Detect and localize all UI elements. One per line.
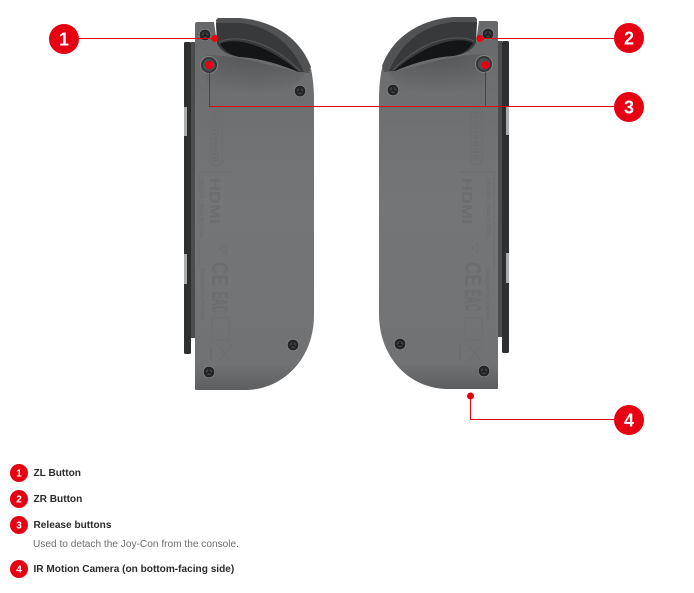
callout 2: 2 xyxy=(624,28,634,48)
legend xyxy=(10,464,239,578)
callout 3: 3 xyxy=(624,98,634,118)
engraving: right Joy-Con markings: Nintendo xyxy=(471,112,481,160)
engraving: right Joy-Con markings xyxy=(458,108,494,362)
engraving: left Joy-Con markings xyxy=(198,110,234,362)
leader line 1 xyxy=(64,35,218,42)
legend item 2: ZR Button xyxy=(34,494,82,505)
legend item 3: 3 xyxy=(16,520,22,532)
engraving: right Joy-Con markings: Designed by Nintendo xyxy=(484,268,490,321)
engraving: left Joy-Con markings: EAC xyxy=(207,292,233,313)
callout 1 xyxy=(49,24,79,54)
leader line 4 xyxy=(467,392,629,420)
left Joy-Con xyxy=(184,18,314,390)
legend item 3 xyxy=(10,516,239,550)
callout 2 xyxy=(614,23,644,53)
legend item 4: 4 xyxy=(16,564,22,576)
engraving: right Joy-Con markings: HDMI xyxy=(458,178,475,224)
engraving: right Joy-Con markings: CE xyxy=(460,262,486,286)
leader lines 3 xyxy=(206,61,629,106)
legend item 4 xyxy=(10,560,234,578)
legend item 1: 1 xyxy=(16,468,22,480)
callout 4: 4 xyxy=(624,410,634,430)
legend item 2: 2 xyxy=(16,494,22,506)
callout 1: 1 xyxy=(59,30,69,50)
legend item 3: Release buttons xyxy=(34,520,112,531)
engraving: right Joy-Con markings: EAC xyxy=(460,290,486,311)
engraving: left Joy-Con markings: HAC-016 · Made in China xyxy=(198,178,204,237)
callout 4 xyxy=(614,405,644,435)
legend item 3: Used to detach the Joy-Con from the console. xyxy=(33,539,239,550)
legend item 4: IR Motion Camera (on bottom-facing side) xyxy=(34,564,234,575)
engraving: left Joy-Con markings: CE xyxy=(207,262,233,286)
engraving: right Joy-Con markings: HAC-015 · Made in China xyxy=(485,178,491,237)
legend item 1 xyxy=(10,464,81,482)
engraving: left Joy-Con markings: HDMI xyxy=(206,178,223,224)
legend item 2 xyxy=(10,490,82,508)
leader line 2 xyxy=(476,35,629,42)
engraving: left Joy-Con markings: Nintendo xyxy=(211,114,221,162)
legend item 1: ZL Button xyxy=(34,468,81,479)
callout 3 xyxy=(614,92,644,122)
right Joy-Con xyxy=(379,17,509,389)
engraving: left Joy-Con markings: Designed by Nintendo xyxy=(199,268,205,321)
